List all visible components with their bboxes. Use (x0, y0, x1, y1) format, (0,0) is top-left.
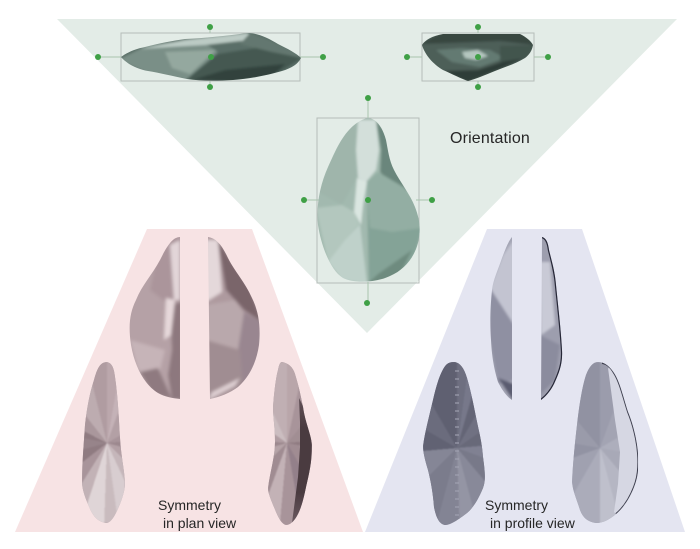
profile view background trapezoid (365, 229, 685, 532)
dark outer edge (602, 362, 638, 514)
dotted centre line (455, 370, 459, 520)
plan view background trapezoid (15, 229, 363, 532)
dark facet (292, 398, 312, 522)
right half of profile view (541, 237, 562, 400)
label: symmetry in plan view (158, 497, 236, 531)
label: symmetry in profile view (485, 497, 575, 531)
left half of plan view (130, 237, 180, 399)
panel: symmetry in plan view (15, 229, 363, 532)
label: symmetry in plan view: Symmetry (158, 497, 221, 513)
bottom-left radial profile (82, 362, 125, 523)
label: symmetry in profile view: in profile view (490, 515, 575, 531)
label: orientation: Orientation (450, 130, 530, 147)
bottom-right radial profile (572, 362, 638, 523)
bottom-left radial profile (423, 362, 485, 525)
top-left rock with bounding box (95, 24, 326, 90)
label: symmetry in profile view: Symmetry (485, 497, 548, 513)
top-right rock with bounding box (404, 24, 551, 90)
label: symmetry in plan view: in plan view (163, 515, 236, 531)
orientation background triangle (57, 19, 677, 333)
central rock with bounding box (301, 95, 435, 306)
light flaked edge (608, 368, 638, 514)
panel: orientation (57, 19, 677, 333)
panel: symmetry in profile view (365, 229, 685, 532)
bottom-right radial profile (268, 362, 312, 525)
right half of plan view (208, 237, 260, 399)
left half of profile view (490, 237, 512, 400)
